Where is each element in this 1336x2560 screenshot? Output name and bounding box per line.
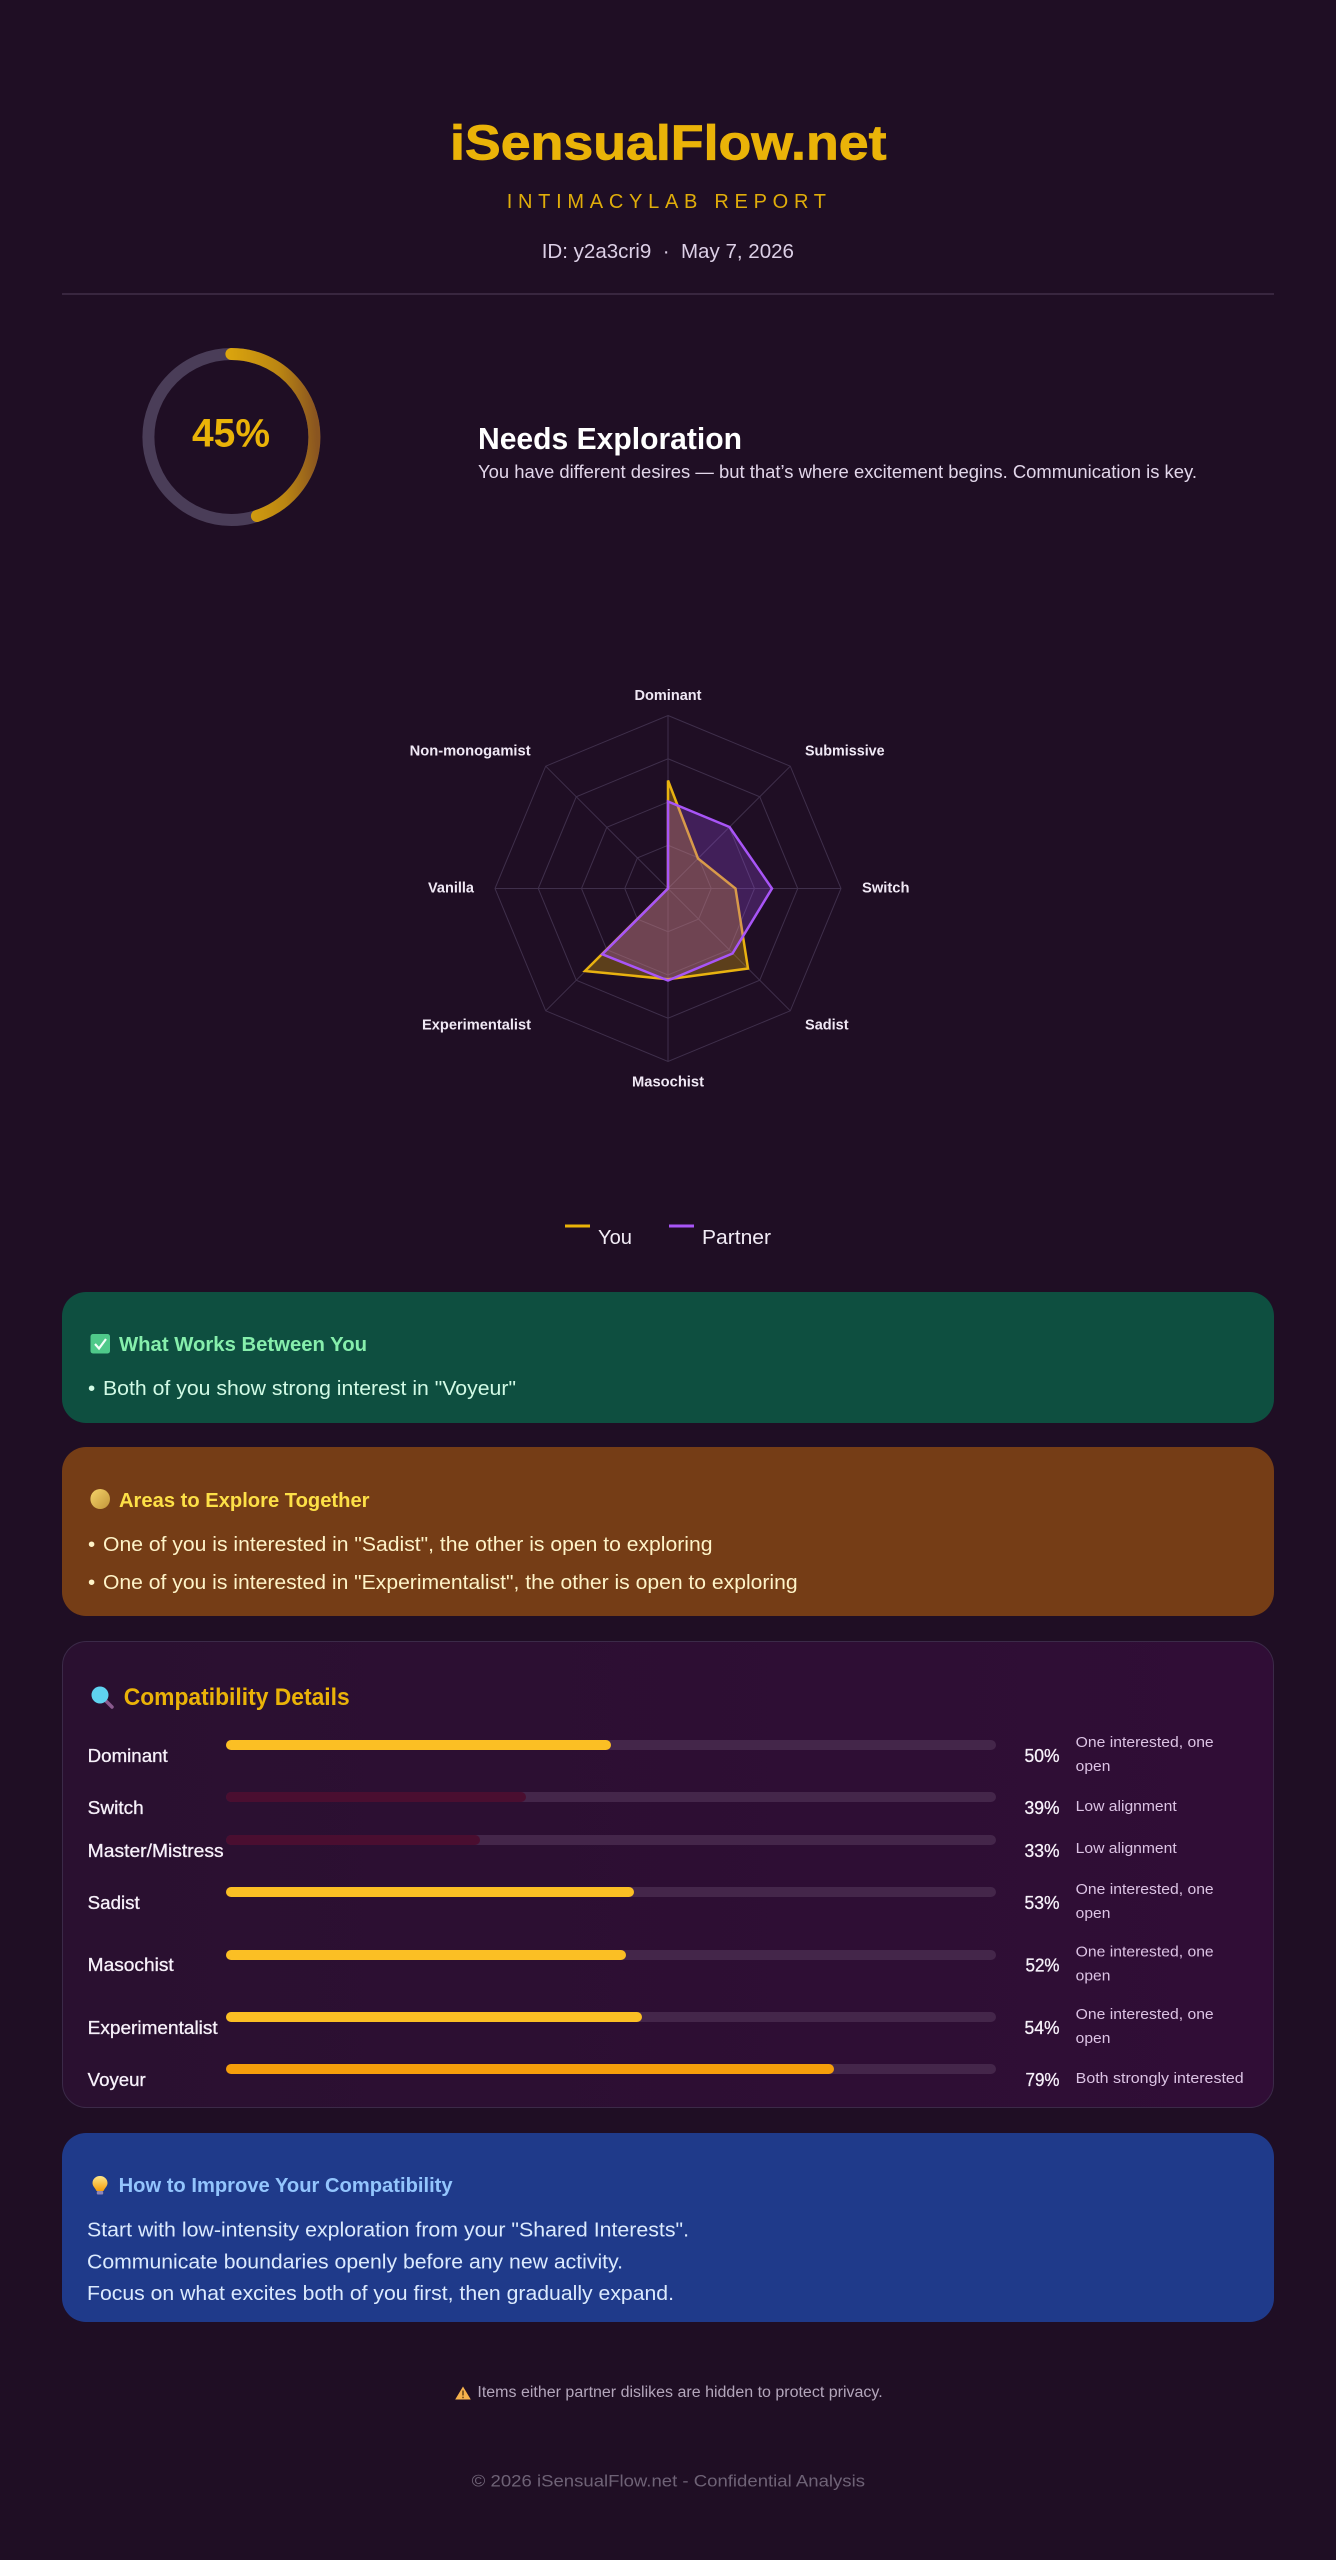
- row: switch: 39%: [1024, 1797, 1060, 1818]
- row: sadist: 53%: [1024, 1892, 1060, 1913]
- axis labels: Masochist: [632, 1075, 704, 1091]
- icon: warning: [455, 2386, 471, 2400]
- row: masochist: open: [1076, 1969, 1110, 1985]
- panel: how to improve: [62, 2133, 1274, 2322]
- heading: What Works Between You: [119, 1333, 367, 1356]
- row: voyeur: Voyeur: [88, 2069, 146, 2090]
- heading: How to Improve Your Compatibility: [119, 2174, 453, 2197]
- axis labels: Switch: [862, 881, 910, 897]
- row: dominant: open: [1076, 1759, 1110, 1775]
- row: masochist: Masochist: [88, 1954, 174, 1975]
- axis labels: Sadist: [805, 1018, 849, 1034]
- list items: [88, 1533, 798, 1594]
- row: switch: Low alignment: [1076, 1799, 1177, 1815]
- row: voyeur: Both strongly interested: [1076, 2071, 1244, 2087]
- title: iSensualFlow.net: [450, 116, 886, 170]
- row: dominant: [88, 1735, 1214, 1775]
- footer: © 2026 iSensualFlow.net - Confidential Analysis: [472, 2473, 865, 2491]
- list items: •: [88, 1533, 95, 1556]
- legend: [565, 1224, 771, 1249]
- heading: Areas to Explore Together: [119, 1489, 370, 1512]
- row: sadist: One interested, one: [1076, 1882, 1214, 1898]
- row: masochist: 52%: [1026, 1954, 1060, 1976]
- row: sadist: open: [1076, 1906, 1110, 1922]
- row: experimentalist: [88, 2007, 1214, 2047]
- heading: Compatibility Details: [124, 1684, 350, 1711]
- score value: 45%: [192, 412, 270, 456]
- advice text: Focus on what excites both of you first, then gradually expand.: [87, 2282, 674, 2305]
- row: experimentalist: Experimentalist: [88, 2017, 218, 2038]
- summary heading: Needs Exploration: [478, 421, 742, 456]
- report id and date: ID: y2a3cri9 · May 7, 2026: [542, 240, 794, 263]
- list items: One of you is interested in "Sadist", the other is open to exploring: [103, 1533, 712, 1556]
- row: experimentalist: One interested, one: [1076, 2007, 1214, 2023]
- radar chart: [410, 688, 910, 1091]
- row: master/mistress: [88, 1835, 1177, 1861]
- row: voyeur: 79%: [1026, 2069, 1060, 2090]
- row: switch: [88, 1792, 1177, 1818]
- axis labels: Dominant: [634, 688, 702, 704]
- list item: Both of you show strong interest in "Voyeur": [103, 1377, 516, 1400]
- advice text: [87, 2219, 689, 2305]
- row: sadist: Sadist: [88, 1892, 140, 1913]
- axis labels: Non-monogamist: [410, 744, 531, 760]
- score ring: [148, 354, 314, 520]
- axis labels: [410, 688, 910, 1091]
- score summary: [478, 421, 1197, 482]
- legend: Partner: [702, 1226, 771, 1249]
- row: dominant: Dominant: [88, 1745, 168, 1766]
- panel: areas to explore: [62, 1447, 1274, 1616]
- icon: magnifier: [92, 1686, 112, 1707]
- row: experimentalist: open: [1076, 2031, 1110, 2047]
- row: masochist: One interested, one: [1076, 1945, 1214, 1961]
- advice text: Communicate boundaries openly before any new activity.: [87, 2250, 623, 2274]
- advice text: Start with low-intensity exploration from your "Shared Interests".: [87, 2219, 689, 2242]
- row: experimentalist: 54%: [1024, 2017, 1060, 2038]
- series: partner: [602, 802, 772, 980]
- row: switch: Switch: [88, 1797, 144, 1818]
- icon: yellow circle: [90, 1489, 110, 1509]
- row: master/mistress: Low alignment: [1076, 1841, 1177, 1857]
- panel: compatibility details: [62, 1642, 1274, 2108]
- icon: check mark: [90, 1334, 110, 1354]
- summary text: You have different desires — but that’s where excitement begins. Communication is key.: [478, 461, 1197, 482]
- row: master/mistress: Master/Mistress: [88, 1840, 224, 1861]
- header: [450, 116, 886, 263]
- axis labels: Experimentalist: [422, 1018, 531, 1034]
- axis labels: Vanilla: [428, 881, 475, 897]
- legend: You: [598, 1226, 632, 1249]
- row: sadist: [88, 1882, 1214, 1922]
- privacy note: Items either partner dislikes are hidden to protect privacy.: [477, 2384, 883, 2401]
- row: masochist: [88, 1945, 1214, 1985]
- row: dominant: 50%: [1024, 1745, 1060, 1766]
- subtitle: INTIMACYLAB REPORT: [507, 191, 826, 213]
- list items: One of you is interested in "Experimentalist", the other is open to exploring: [103, 1571, 798, 1594]
- row: dominant: One interested, one: [1076, 1735, 1214, 1751]
- panel: what works: [62, 1292, 1274, 1423]
- row: voyeur: [88, 2064, 1244, 2090]
- row: master/mistress: 33%: [1024, 1840, 1060, 1861]
- axis labels: Submissive: [805, 744, 885, 760]
- list item: •: [88, 1377, 95, 1400]
- list items: •: [88, 1571, 95, 1594]
- series: you: [585, 780, 748, 979]
- icon: light bulb: [92, 2176, 108, 2194]
